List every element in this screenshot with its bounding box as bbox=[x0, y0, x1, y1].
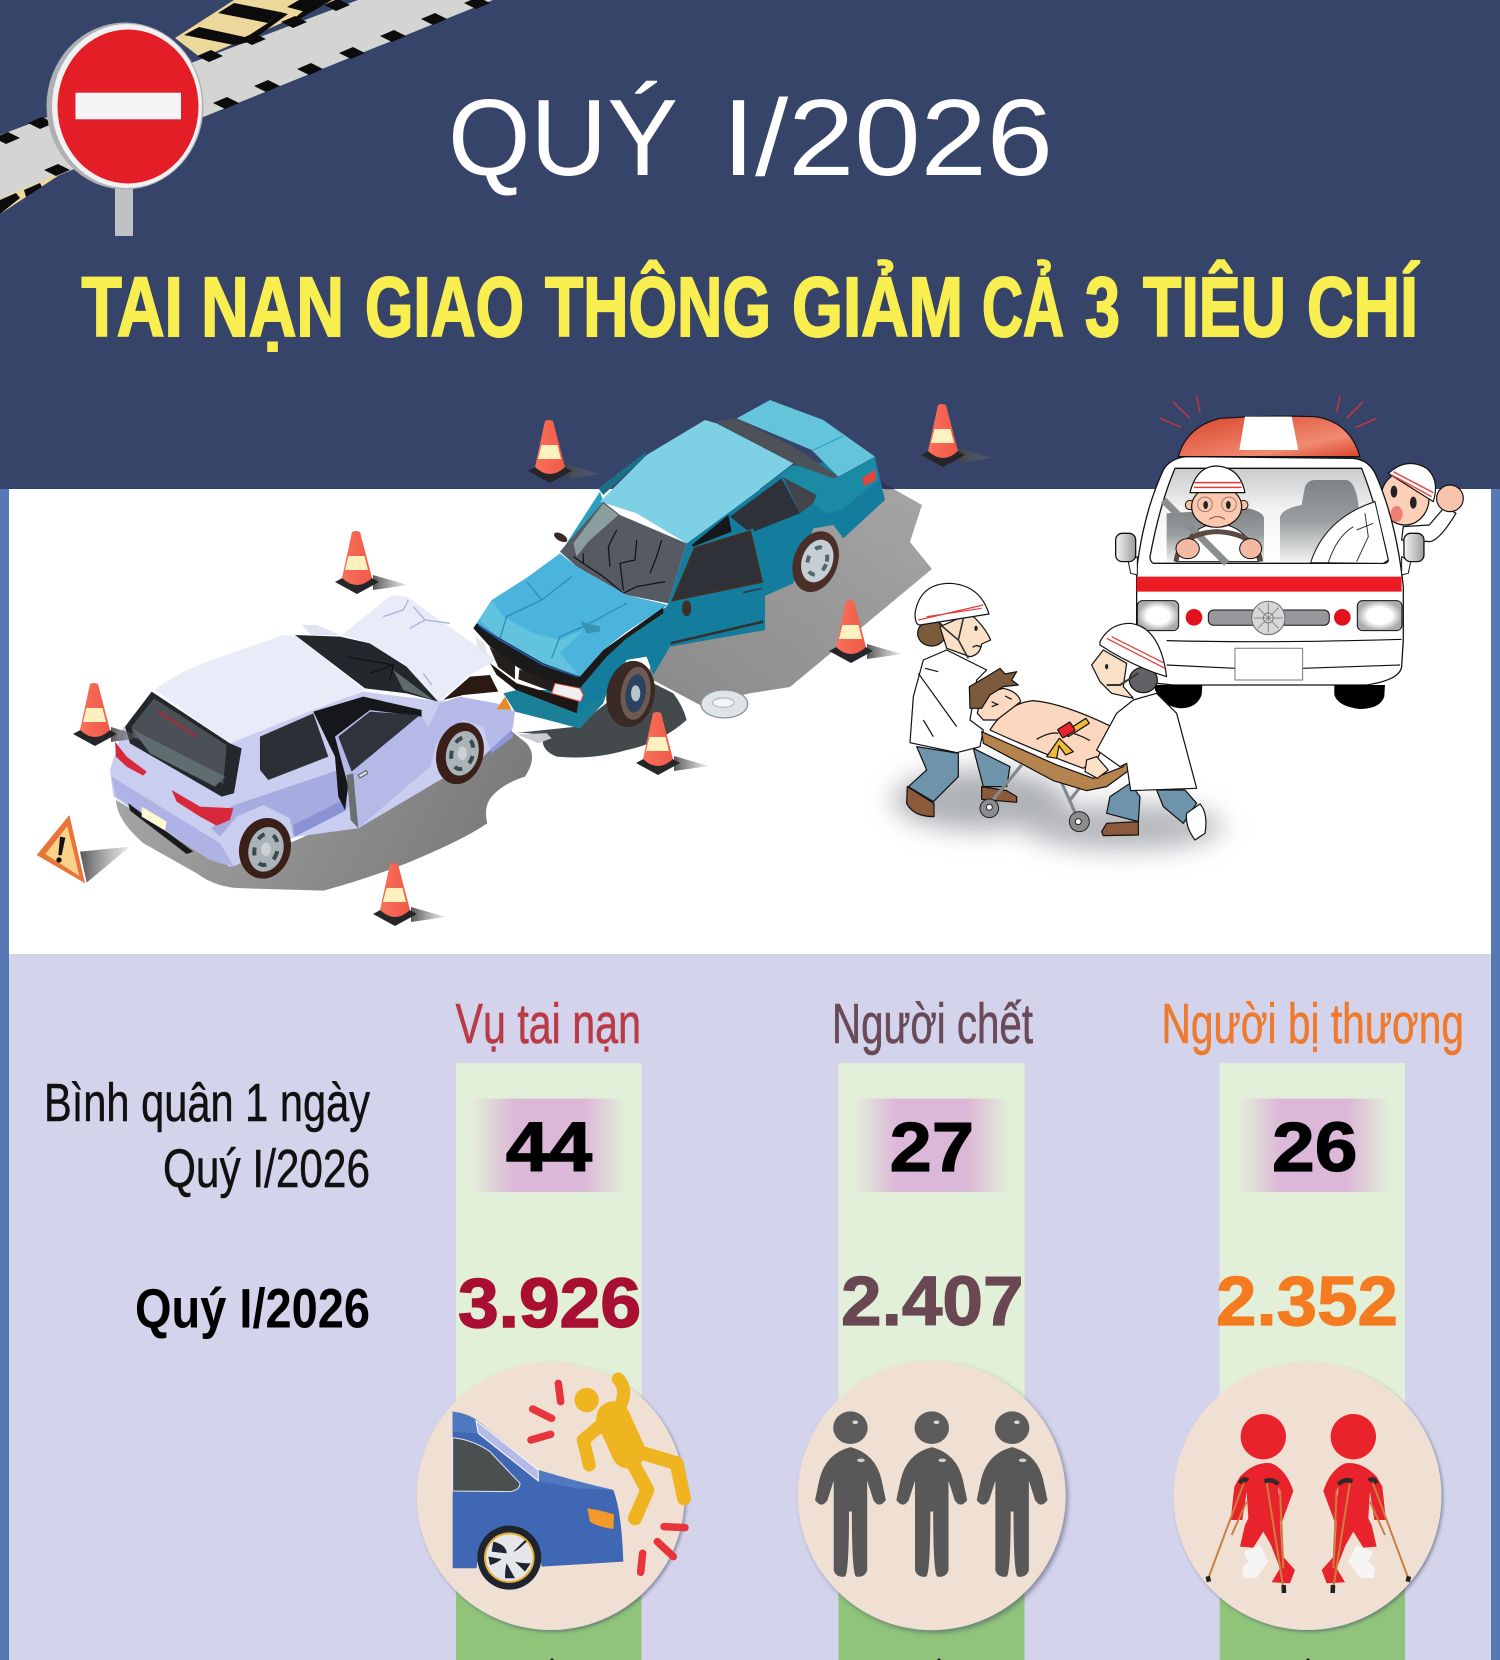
subtitle: traffic accident headline: 3 bbox=[1085, 260, 1120, 354]
circle background bbox=[798, 1361, 1066, 1630]
traffic cone 3 bbox=[636, 712, 709, 775]
daily value box: 44 bbox=[506, 1108, 592, 1186]
quarter value: 2.407 bbox=[841, 1262, 1024, 1340]
patient on stretcher bbox=[969, 668, 1129, 791]
person 1 bbox=[815, 1411, 886, 1577]
impact dashes bbox=[531, 1383, 685, 1572]
injured person left bbox=[1208, 1414, 1295, 1593]
daily value box: 27 bbox=[890, 1108, 974, 1186]
circle background bbox=[417, 1362, 685, 1630]
side mirrors bbox=[1116, 533, 1424, 575]
white illustration panel bbox=[9, 489, 1491, 954]
subtitle: traffic accident headline: CẢ bbox=[982, 260, 1064, 354]
tyres bbox=[1155, 685, 1385, 709]
side windows bbox=[692, 477, 817, 547]
right medic bbox=[1085, 623, 1206, 840]
traffic cone 6 bbox=[373, 863, 446, 926]
falling figure bbox=[576, 1379, 684, 1518]
car body side bbox=[513, 457, 885, 728]
daily value box bbox=[471, 1098, 627, 1192]
stretcher wheels bbox=[980, 765, 1089, 832]
roof bbox=[155, 635, 365, 743]
subtitle: traffic accident headline: GIẢM bbox=[792, 260, 963, 354]
daily value box bbox=[853, 1098, 1011, 1192]
rear lights and plate bbox=[115, 742, 233, 831]
siren rays bbox=[1160, 396, 1377, 427]
bumper and number plate bbox=[1167, 639, 1402, 680]
windshield and seats bbox=[1150, 468, 1388, 563]
rear deck bbox=[715, 400, 878, 513]
daily value box: 26 bbox=[1272, 1108, 1358, 1186]
subtitle: traffic accident headline: TIÊU bbox=[1143, 260, 1286, 354]
statistics panel background bbox=[9, 954, 1491, 1660]
traffic cone 5 bbox=[73, 683, 146, 746]
title: QUÝ I/2026: QUÝ bbox=[448, 77, 678, 199]
column header: Người chết: Người chết bbox=[832, 992, 1033, 1056]
wheels bbox=[601, 525, 847, 731]
icon: warning triangle bbox=[37, 815, 130, 883]
left medic bbox=[907, 583, 1017, 817]
siren light bar bbox=[1178, 416, 1360, 457]
headlights, grille and emblem bbox=[1137, 601, 1402, 635]
icon circle: three people bbox=[798, 1361, 1066, 1630]
driver bbox=[1163, 466, 1262, 563]
subtitle: traffic accident headline: GIAO bbox=[365, 260, 524, 354]
row label: daily average: Quý I/2026 bbox=[163, 1139, 370, 1199]
windshield bbox=[295, 635, 438, 702]
passenger medic coat bbox=[1311, 502, 1388, 563]
icon: no entry sign bbox=[46, 22, 204, 236]
person 3 bbox=[977, 1411, 1048, 1577]
car shadow bbox=[513, 480, 932, 757]
subtitle: traffic accident headline: CHÍ bbox=[1307, 260, 1420, 354]
row label: daily average bbox=[44, 1073, 370, 1199]
title: QUÝ I/2026: I/2026 bbox=[722, 77, 1053, 199]
circle background bbox=[1173, 1362, 1441, 1630]
cut-off text marks at bottom edge bbox=[550, 1658, 1310, 1660]
illustration: blue car bbox=[473, 400, 932, 757]
traffic cone 7 bbox=[921, 404, 994, 467]
medic arm and head out of the window bbox=[1381, 464, 1463, 542]
subtitle: traffic accident headline: TAI NẠN bbox=[82, 260, 344, 354]
column header: Vụ tai nạn: Vụ tai nạn bbox=[456, 992, 641, 1056]
traffic cone 1 bbox=[528, 420, 601, 483]
hood bbox=[477, 553, 668, 677]
car bbox=[453, 1412, 623, 1590]
illustration: silver car bbox=[110, 595, 532, 891]
daily value box bbox=[1238, 1098, 1391, 1192]
subtitle: traffic accident headline bbox=[82, 260, 1420, 354]
traffic cone 2 bbox=[829, 600, 902, 663]
A pillar bbox=[560, 452, 646, 553]
icon circle: car hitting pedestrian bbox=[417, 1362, 685, 1630]
red stripe bbox=[1137, 577, 1402, 592]
open door bbox=[552, 528, 765, 647]
row label: quarter total: Quý I/2026 bbox=[135, 1276, 370, 1340]
ground shadow bbox=[893, 770, 1223, 850]
cracked windshield bbox=[560, 502, 687, 603]
front grille and bumper bbox=[473, 607, 663, 728]
injured person right bbox=[1322, 1414, 1409, 1593]
header panel bbox=[0, 0, 1500, 489]
icon circle: injured people on crutches bbox=[1173, 1362, 1441, 1630]
ambulance body bbox=[1137, 457, 1403, 685]
wheels bbox=[232, 717, 491, 885]
subtitle: traffic accident headline: THÔNG bbox=[545, 260, 771, 354]
row label: daily average: Bình quân 1 ngày bbox=[44, 1073, 370, 1133]
column: accidents bbox=[456, 1063, 642, 1660]
roof bbox=[600, 420, 793, 543]
title: QUÝ I/2026 bbox=[448, 77, 1053, 199]
car shadow bbox=[116, 730, 532, 891]
person 2 bbox=[896, 1411, 967, 1577]
side windows bbox=[260, 697, 422, 810]
open door bbox=[335, 710, 430, 828]
column: injured bbox=[1216, 1063, 1405, 1660]
traffic cone 4 bbox=[335, 531, 408, 594]
illustration: medics carrying stretcher bbox=[893, 583, 1223, 850]
car body bbox=[110, 692, 515, 867]
rear window bbox=[125, 692, 242, 797]
quarter value: 2.352 bbox=[1216, 1262, 1398, 1340]
quarter value: 3.926 bbox=[458, 1264, 641, 1342]
illustration: ambulance bbox=[1116, 396, 1463, 709]
crumpled hood bbox=[302, 595, 512, 709]
column: deaths bbox=[838, 1063, 1024, 1660]
road with barrier bbox=[0, 0, 493, 214]
icon: loose hubcap bbox=[701, 690, 748, 718]
